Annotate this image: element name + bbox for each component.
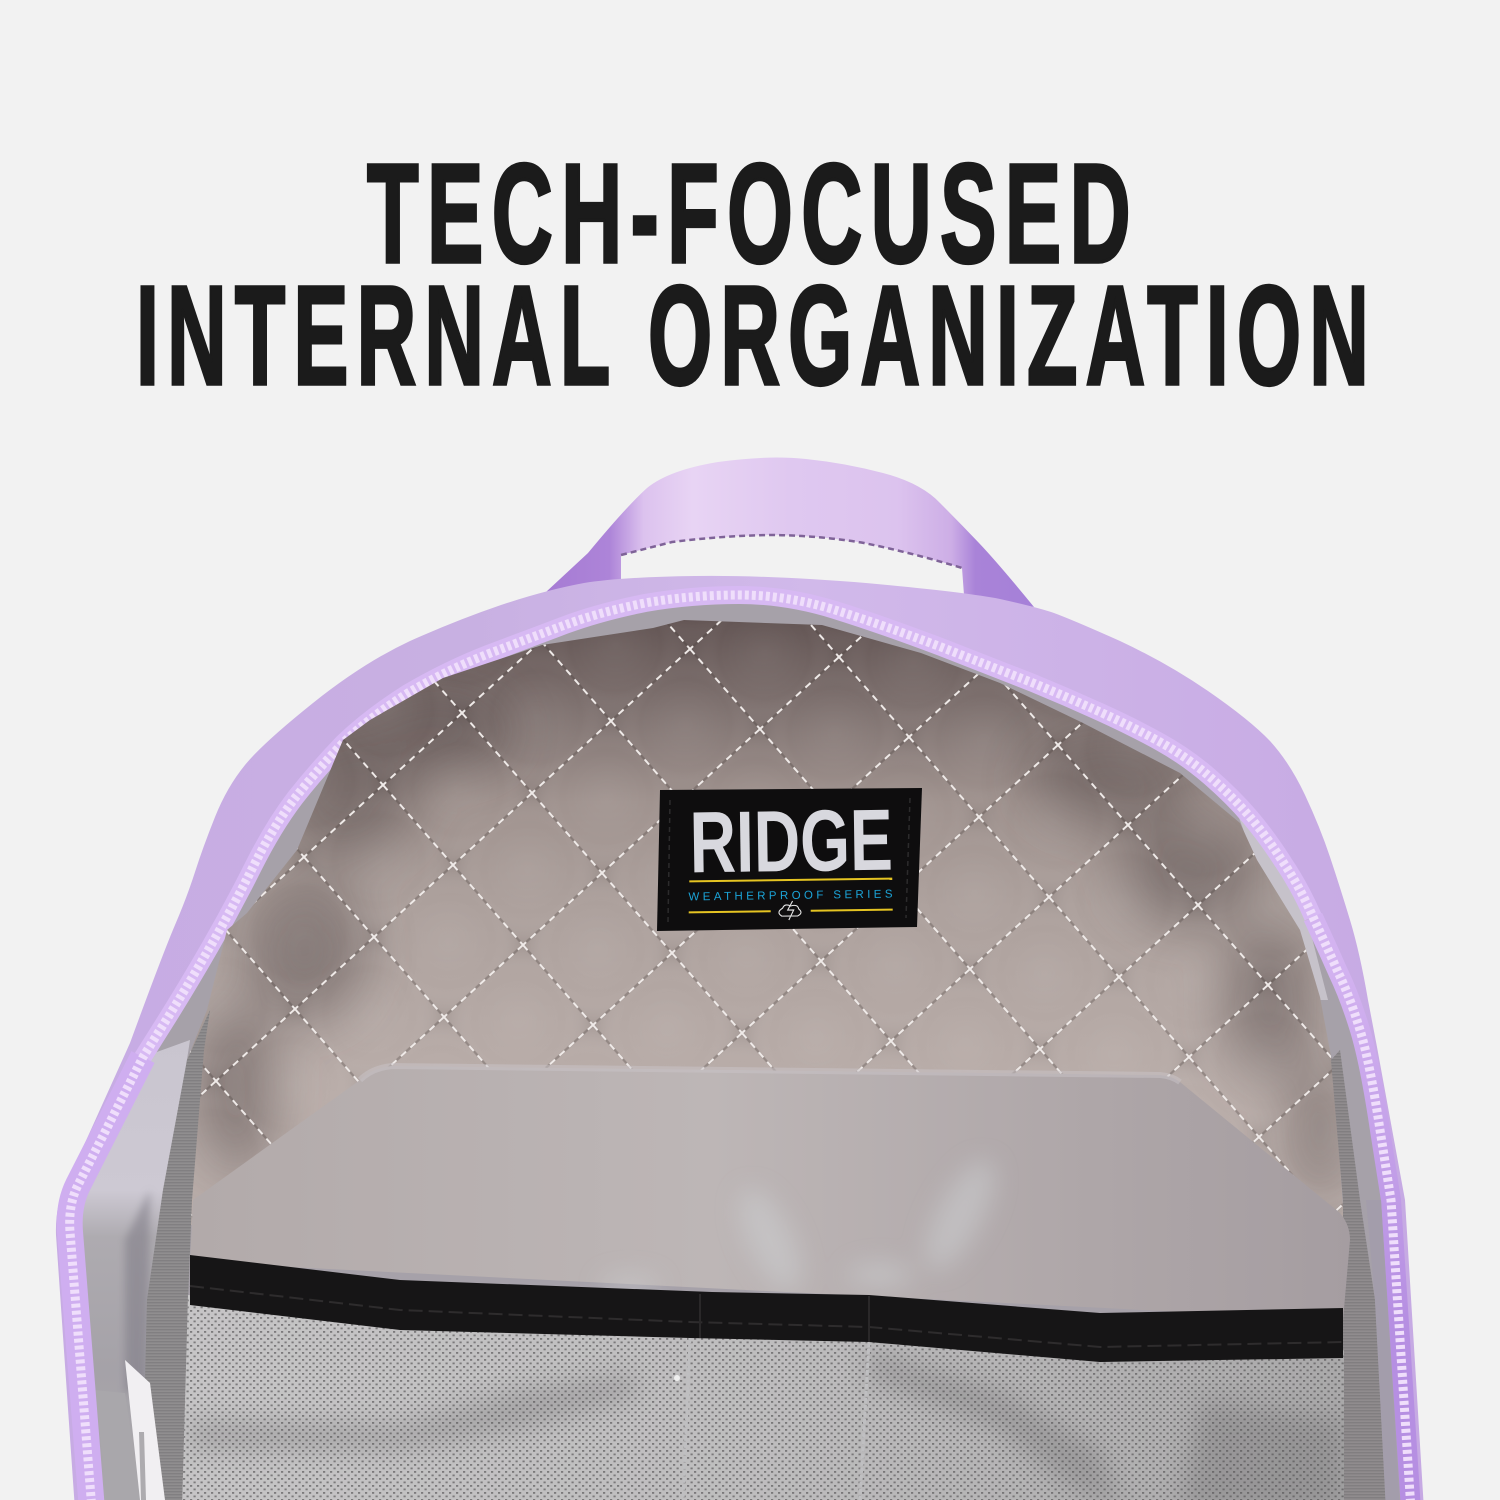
right lining under zipper (1366, 1200, 1400, 1500)
quilted back panel (180, 610, 1350, 1240)
shadow blotches on quilt (193, 692, 1350, 1200)
satin laptop divider (190, 1066, 1350, 1320)
woven RIDGE label: WEATHERPROOF SERIES (688, 889, 893, 903)
mesh pocket (180, 1290, 1350, 1500)
icon: top carry handle (546, 458, 1034, 607)
white hang tag (125, 1360, 165, 1500)
left satin lining (70, 1040, 190, 1500)
right gray webbing strip (1331, 1050, 1386, 1500)
left gray webbing strip (145, 1010, 210, 1500)
backpack outer shell (56, 576, 1424, 1500)
interior lining (70, 595, 1411, 1500)
title (136, 134, 1377, 414)
zipper (70, 595, 1411, 1500)
woven RIDGE label: RIDGE (689, 792, 893, 891)
right satin highlight (1238, 815, 1328, 1000)
black elastic band (190, 1255, 1343, 1362)
woven RIDGE label (657, 788, 922, 931)
backpack photo (56, 458, 1424, 1500)
